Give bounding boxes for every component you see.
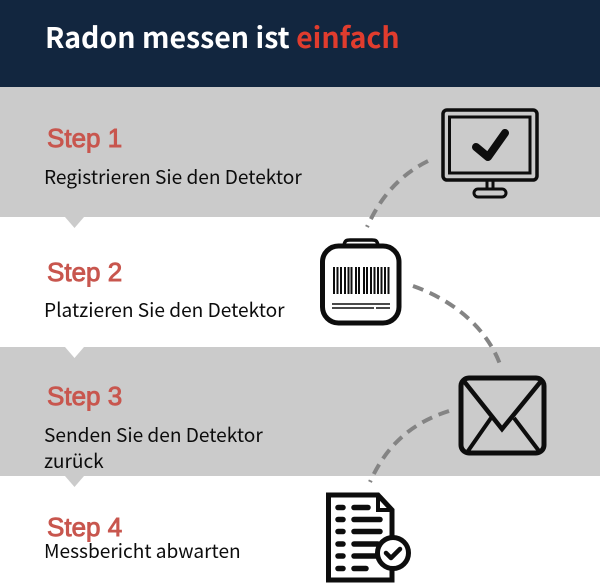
step 3 text: Senden Sie den Detektor	[44, 420, 263, 448]
header banner	[0, 0, 600, 87]
step 2 text: Platzieren Sie den Detektor	[44, 295, 285, 323]
step 1 text: Registrieren Sie den Detektor	[44, 162, 302, 190]
step 4 heading: Step 4	[47, 512, 122, 542]
step 3 text: zurück	[44, 446, 104, 474]
step 1 heading: Step 1	[47, 123, 122, 153]
panel: step 3 band	[0, 347, 600, 476]
title: Radon messen ist einfach	[45, 16, 400, 57]
step 3 text	[44, 420, 263, 474]
step 4 text: Messbericht abwarten	[44, 536, 241, 564]
step 2 heading: Step 2	[47, 257, 122, 287]
panel: step 1 band	[0, 87, 600, 217]
step 3 heading: Step 3	[47, 381, 122, 411]
